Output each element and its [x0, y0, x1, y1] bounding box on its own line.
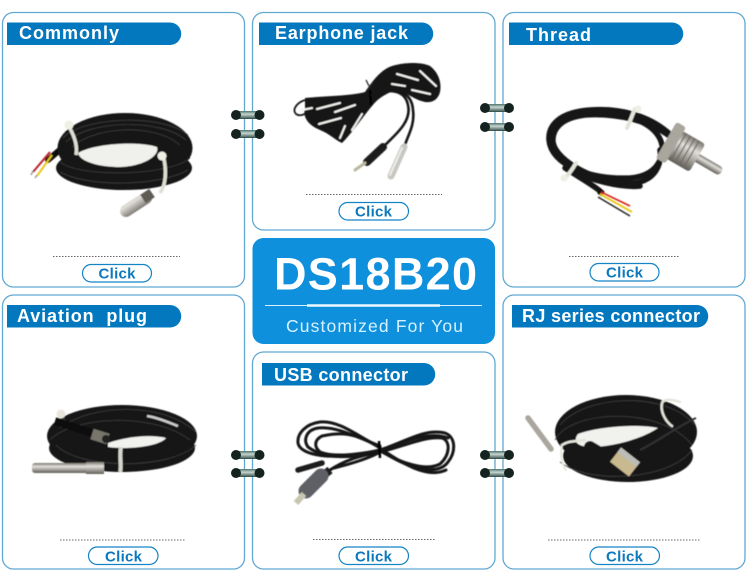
panel: Aviation plug [2, 295, 244, 569]
dotted rule [313, 538, 436, 540]
photo: USB cable [296, 422, 454, 503]
panel: RJ series connector [503, 295, 745, 569]
dotted rule [548, 539, 701, 541]
dotted rule [53, 256, 180, 258]
button: Click: Click [98, 266, 136, 282]
photo: aviation plug cable [32, 405, 197, 474]
dotted rule [569, 256, 679, 258]
banner: Thread: Thread [526, 25, 591, 45]
photo: threaded probe cable [549, 106, 732, 216]
banner: RJ series connector: RJ series connector [522, 306, 700, 326]
panel: USB connector [252, 352, 495, 569]
subtitle: Customized For You [286, 316, 463, 336]
banner: Commonly: Commonly [19, 23, 119, 43]
photo: cable with bare wires [31, 113, 192, 211]
photo: earphone jack cable [294, 63, 441, 176]
center panel: DS18B20 [252, 238, 495, 344]
button: Click: Click [606, 264, 644, 282]
binding rings: top left [231, 110, 264, 139]
banner: Earphone jack [259, 22, 433, 45]
button: Click [590, 264, 659, 282]
banner: USB connector: USB connector [274, 365, 408, 385]
binding rings: bottom left [231, 450, 264, 478]
button: Click: Click [355, 204, 393, 220]
binding rings: top right [480, 103, 514, 132]
divider lines [265, 304, 482, 306]
button: Click [88, 547, 158, 566]
button: Click [339, 202, 408, 220]
photo: RJ connector cable [528, 395, 697, 482]
button: Click: Click [105, 548, 143, 566]
banner: USB connector [262, 363, 435, 386]
button: Click: Click [606, 548, 644, 566]
heading: DS18B20: DS18B20 [274, 248, 477, 300]
binding rings: bottom right [480, 450, 514, 478]
dotted rule [60, 539, 186, 541]
button: Click [590, 547, 660, 566]
banner: Aviation plug: Aviation plug [17, 306, 147, 326]
banner: Commonly [7, 22, 181, 45]
button: Click: Click [355, 548, 393, 566]
dotted rule [306, 194, 442, 196]
button: Click [82, 264, 152, 282]
button: Click [339, 547, 408, 566]
panel: Thread [503, 12, 745, 287]
panel: Earphone jack [252, 12, 495, 230]
banner: Thread [509, 22, 683, 45]
banner: Aviation plug [7, 305, 181, 328]
panel: Commonly [2, 12, 244, 287]
banner: Earphone jack: Earphone jack [275, 23, 409, 43]
